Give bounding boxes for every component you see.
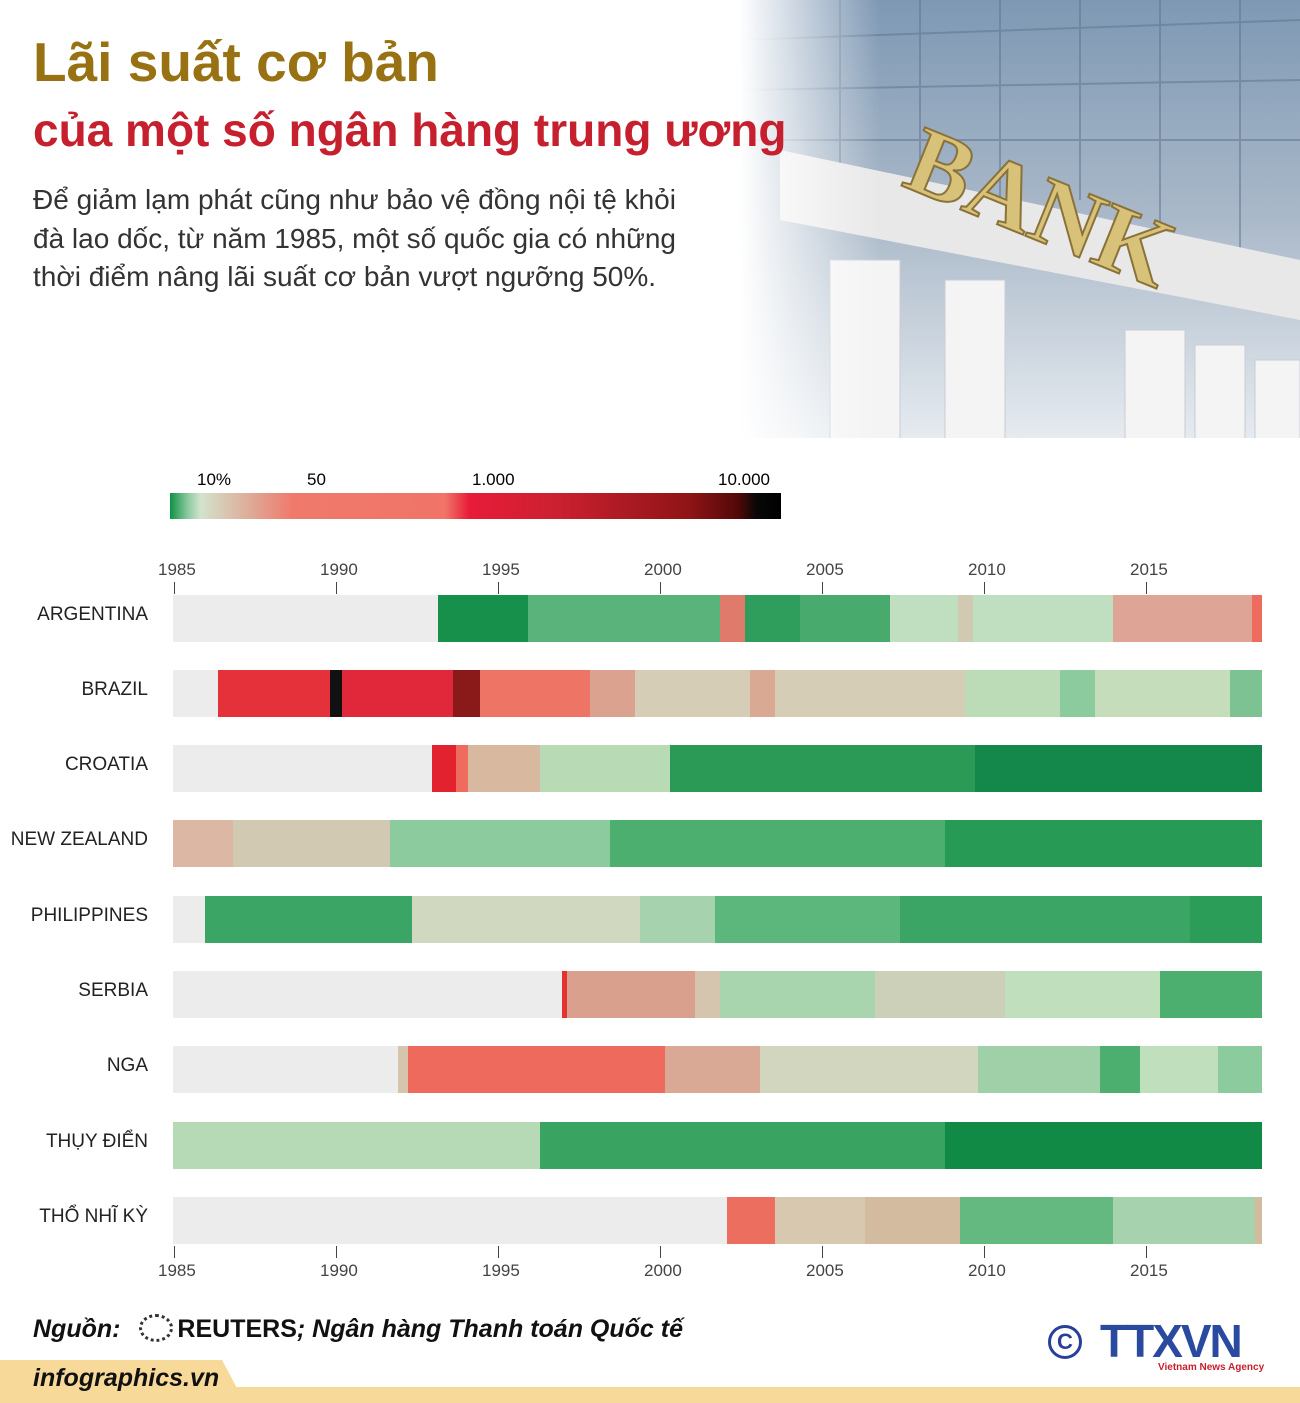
intro text: thời điểm nâng lãi suất cơ bản vượt ngưỡng 50%. xyxy=(33,261,656,292)
top year axis: 2010 xyxy=(968,560,1006,579)
row: Tho Nhi Ky: THỔ NHĨ KỲ xyxy=(39,1206,148,1227)
intro text: Để giảm lạm phát cũng như bảo vệ đồng nội tệ khỏi xyxy=(33,184,676,215)
logo: TTXVN: TTXVN xyxy=(1100,1315,1241,1367)
row: Tho Nhi Ky xyxy=(39,1197,1262,1244)
row: Philippines xyxy=(31,896,1262,943)
header image: bank building xyxy=(748,0,1300,438)
row: Nga: NGA xyxy=(107,1055,148,1076)
legend: 10.000 xyxy=(718,470,770,489)
top year axis: 1995 xyxy=(482,560,520,579)
footer tab: infographics.vn: infographics.vn xyxy=(33,1364,219,1392)
legend: 10% xyxy=(197,470,231,489)
footer tab: infographics.vn xyxy=(0,1360,236,1391)
bottom year axis: 2010 xyxy=(968,1261,1006,1280)
title: Lãi suất cơ bản xyxy=(33,31,439,93)
row: Argentina xyxy=(37,595,1262,642)
top year axis: 2015 xyxy=(1130,560,1168,579)
logo: TTXVN: C xyxy=(1057,1329,1073,1354)
intro text xyxy=(33,184,676,292)
row: Croatia: CROATIA xyxy=(65,754,148,775)
bottom year axis: 1985 xyxy=(158,1261,196,1280)
top year axis: 2005 xyxy=(806,560,844,579)
top year axis xyxy=(158,560,1168,594)
top year axis: 1985 xyxy=(158,560,196,579)
bottom year axis: 2000 xyxy=(644,1261,682,1280)
legend: 1.000 xyxy=(472,470,515,489)
bottom year axis: 1995 xyxy=(482,1261,520,1280)
top year axis: 1990 xyxy=(320,560,358,579)
intro text: đà lao dốc, từ năm 1985, một số quốc gia có những xyxy=(33,222,676,254)
logo: TTXVN: Vietnam News Agency xyxy=(1158,1362,1264,1373)
row: Philippines: PHILIPPINES xyxy=(31,905,148,926)
row: Thuy Dien xyxy=(46,1122,1262,1169)
row: Nga xyxy=(107,1046,1262,1093)
row: Serbia: SERBIA xyxy=(78,980,148,1001)
row: Brazil: BRAZIL xyxy=(81,679,148,700)
row: New Zealand xyxy=(11,820,1262,867)
row: Croatia xyxy=(65,745,1262,792)
bottom year axis: 1990 xyxy=(320,1261,358,1280)
legend xyxy=(170,470,781,519)
top year axis: 2000 xyxy=(644,560,682,579)
logo: TTXVN xyxy=(1048,1315,1264,1373)
row: Thuy Dien: THỤY ĐIỂN xyxy=(46,1131,148,1152)
BANK text: BANK xyxy=(892,105,1189,308)
source: Nguồn: REUTERS; Ngân hàng Thanh toán Quốc tế xyxy=(33,1315,683,1343)
bottom year axis xyxy=(158,1246,1168,1280)
bottom year axis: 2015 xyxy=(1130,1261,1168,1280)
row: New Zealand: NEW ZEALAND xyxy=(11,829,148,850)
row: Brazil xyxy=(81,670,1262,717)
row: Serbia xyxy=(78,971,1262,1018)
row: Argentina: ARGENTINA xyxy=(37,604,148,625)
footer band xyxy=(0,1387,1300,1403)
bottom year axis: 2005 xyxy=(806,1261,844,1280)
legend: 50 xyxy=(307,470,326,489)
subtitle: của một số ngân hàng trung ương xyxy=(33,104,786,156)
